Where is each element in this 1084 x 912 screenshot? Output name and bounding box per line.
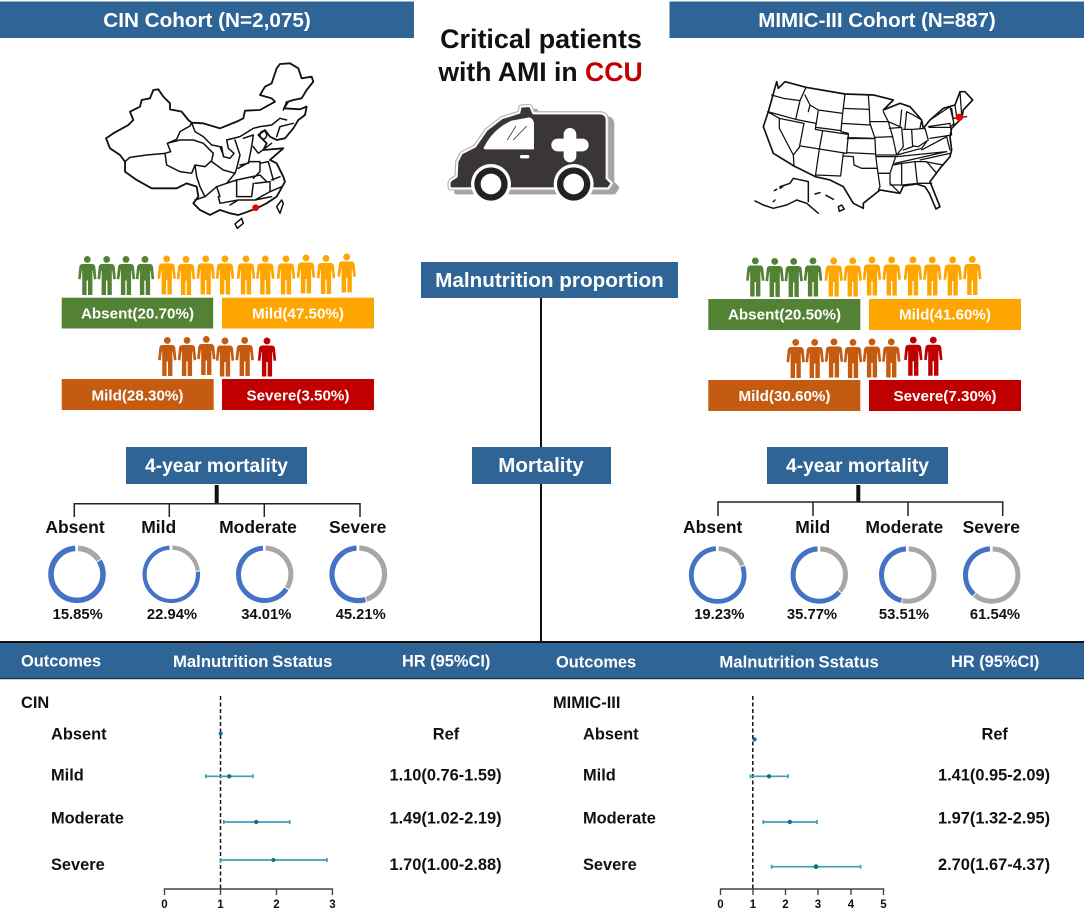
x axis: 2 — [273, 899, 280, 911]
donut: Severe 45.21% — [332, 548, 386, 623]
x axis: 3 — [815, 899, 821, 911]
x axis: 2 — [782, 899, 789, 911]
bar: Mild 30.60% — [708, 380, 860, 411]
panel: MIMIC-III 4-year mortality — [683, 447, 1020, 623]
row labels: Moderate — [583, 810, 656, 828]
x axis: 5 — [880, 899, 887, 911]
group labels: Mild — [795, 517, 830, 537]
CI: severe — [221, 858, 327, 862]
group labels: Absent — [683, 517, 743, 537]
donut: Mild 35.77% — [787, 549, 846, 623]
table header band — [0, 641, 1084, 679]
panel: CIN 4-year mortality — [45, 447, 387, 623]
bar: Absent 20.50%: Absent(20.50%) — [728, 306, 841, 324]
pictogram: moderate and severe patients — [786, 337, 942, 378]
cohort label: MIMIC-III: MIMIC-III — [553, 694, 620, 712]
table header band: Outcomes — [21, 652, 101, 670]
hazard ratios: 1.41(0.95-2.09) — [938, 766, 1050, 784]
row labels: Moderate — [51, 810, 124, 828]
heading: 4-year mortality: 4-year mortality — [145, 456, 288, 477]
heading: 4-year mortality — [767, 447, 948, 484]
pictogram: absent and mild patients — [78, 254, 356, 295]
x axis: 3 — [329, 899, 336, 911]
heading: 4-year mortality — [126, 447, 307, 484]
bar: Mild 30.60%: Mild(30.60%) — [738, 388, 830, 405]
x axis — [161, 889, 336, 911]
row labels: Mild — [583, 766, 616, 784]
tree connector — [215, 485, 219, 503]
group labels: Moderate — [219, 517, 297, 537]
title — [437, 24, 643, 87]
row labels — [583, 726, 656, 874]
tree connector — [856, 485, 860, 502]
group labels: Mild — [141, 517, 176, 537]
panel: MIMIC-III cohort header — [670, 2, 1084, 38]
table header band: Malnutrition Sstatus — [173, 652, 332, 671]
x axis: 1 — [750, 899, 757, 911]
group labels: Moderate — [865, 517, 943, 537]
bar: Severe 7.30% — [869, 380, 1021, 411]
hazard ratios: Ref — [981, 726, 1008, 744]
icon: ambulance — [450, 106, 618, 204]
row labels: Absent — [583, 726, 639, 744]
panel: MIMIC-III cohort header: MIMIC-III Cohort (N=887) — [758, 9, 996, 32]
CI: mild — [750, 774, 788, 778]
hazard ratios — [390, 726, 502, 874]
bar: Severe 3.50%: Severe(3.50%) — [246, 388, 350, 404]
hazard ratios: 1.49(1.02-2.19) — [390, 810, 502, 828]
cohort label: CIN: CIN — [21, 694, 49, 712]
bar: Mild 47.50% — [222, 298, 374, 328]
hazard ratios: Ref — [433, 726, 460, 744]
x axis — [717, 889, 887, 911]
tree branches — [718, 502, 1003, 516]
heading: Mortality — [472, 447, 611, 484]
hazard ratios — [938, 726, 1050, 874]
bar: Mild 28.30% — [62, 379, 214, 410]
panel: CIN cohort header — [0, 2, 414, 38]
panel: CIN forest plot — [21, 694, 502, 911]
panel: CIN cohort header: CIN Cohort (N=2,075) — [103, 9, 311, 32]
map: USA with red location marker — [755, 82, 973, 213]
bar: Absent 20.70%: Absent(20.70%) — [81, 306, 194, 322]
panel: MIMIC-III forest plot — [553, 694, 1050, 911]
bar: Mild 47.50%: Mild(47.50%) — [252, 306, 344, 322]
row labels: Mild — [51, 766, 84, 784]
donut: Absent 15.85%: 15.85% — [53, 607, 103, 623]
row labels: Severe — [51, 856, 105, 874]
bar: Severe 3.50% — [222, 379, 374, 410]
CI: moderate — [224, 820, 290, 824]
donut: Severe 61.54% — [966, 549, 1020, 623]
donut: Moderate 34.01% — [238, 548, 291, 623]
table header band: Malnutrition Sstatus — [719, 652, 879, 672]
x axis: 4 — [848, 899, 855, 911]
donut: Moderate 53.51% — [879, 549, 934, 623]
CI: absent — [219, 731, 223, 736]
title: Critical patients — [440, 24, 642, 54]
donut: Absent 19.23% — [691, 549, 744, 623]
hazard ratios: 1.70(1.00-2.88) — [390, 856, 502, 874]
donut: Absent 15.85% — [51, 548, 103, 623]
CI: moderate — [763, 820, 817, 824]
bar: Absent 20.70% — [62, 298, 213, 328]
heading: Malnutrition proportion — [421, 262, 678, 298]
group labels: Severe — [329, 517, 387, 537]
heading: Malnutrition proportion: Malnutrition proportion — [435, 269, 664, 292]
CI: absent — [752, 737, 757, 741]
bar: Mild 41.60%: Mild(41.60%) — [899, 306, 991, 324]
donut: Moderate 34.01%: 34.01% — [241, 607, 291, 623]
central connector line — [540, 298, 542, 642]
row labels — [51, 726, 124, 874]
row labels: Severe — [583, 856, 637, 874]
tree branches — [74, 504, 360, 517]
donut: Mild 35.77%: 35.77% — [787, 607, 837, 623]
hazard ratios: 2.70(1.67-4.37) — [938, 856, 1050, 874]
row labels: Absent — [51, 726, 107, 744]
bar: Mild 41.60% — [869, 299, 1021, 330]
donut: Moderate 53.51%: 53.51% — [879, 607, 929, 623]
group labels: Absent — [45, 517, 105, 537]
group labels — [45, 517, 387, 537]
reference line at HR 1 — [220, 696, 222, 889]
CI: mild — [206, 774, 253, 778]
pictogram: absent and mild patients — [746, 256, 982, 297]
bar: Absent 20.50% — [708, 299, 860, 330]
donut: Mild 22.94% — [145, 548, 198, 623]
x axis: 1 — [217, 899, 224, 911]
bar: Mild 28.30%: Mild(28.30%) — [92, 388, 184, 404]
donut: Severe 61.54%: 61.54% — [970, 607, 1020, 623]
hazard ratios: 1.97(1.32-2.95) — [938, 810, 1050, 828]
bar: Severe 7.30%: Severe(7.30%) — [893, 388, 997, 405]
title: with AMI in CCU — [437, 57, 643, 87]
reference line at HR 1 — [752, 696, 754, 889]
table header band: HR (95%CI) — [951, 653, 1039, 671]
hazard ratios: 1.10(0.76-1.59) — [390, 766, 502, 784]
heading: Mortality: Mortality — [498, 454, 584, 477]
group labels — [683, 517, 1020, 537]
x axis: 0 — [717, 899, 724, 911]
table header band: HR (95%CI) — [402, 652, 490, 670]
table header band: Outcomes — [556, 654, 636, 672]
group labels: Severe — [963, 517, 1020, 537]
donut: Severe 45.21%: 45.21% — [336, 607, 386, 623]
donut: Absent 19.23%: 19.23% — [694, 607, 744, 623]
panel: CIN malnutrition proportion — [62, 254, 374, 410]
panel: MIMIC-III malnutrition proportion — [708, 256, 1021, 411]
heading: 4-year mortality: 4-year mortality — [786, 456, 929, 477]
donut: Mild 22.94%: 22.94% — [147, 607, 197, 623]
map: China with red location marker — [106, 63, 313, 228]
CI: severe — [772, 864, 861, 869]
x axis: 0 — [161, 899, 168, 911]
pictogram: moderate and severe patients — [158, 336, 276, 376]
